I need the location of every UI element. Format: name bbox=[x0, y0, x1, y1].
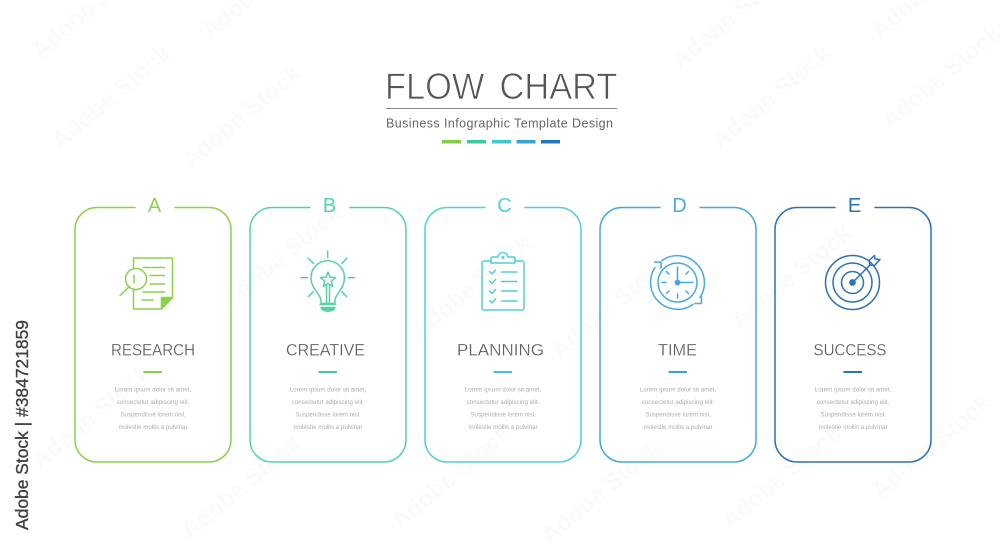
text: Adobe Stock bbox=[707, 39, 837, 155]
body text: Lorem ipsum dolor sit amet, bbox=[465, 386, 541, 394]
body text: Suspendisse lorem nisl, bbox=[470, 412, 536, 418]
card outline D bbox=[600, 208, 756, 462]
body text: consectetur adipiscing elit. bbox=[117, 399, 190, 406]
title rule bbox=[386, 108, 617, 110]
card outline E bbox=[775, 208, 931, 462]
icon: clipboard checklist bbox=[482, 252, 524, 310]
body text: molestie mollis a pulvinar bbox=[118, 424, 188, 431]
text: Adobe Stock bbox=[47, 39, 177, 155]
heading: time: TIME bbox=[658, 340, 697, 360]
panel: time bbox=[600, 195, 756, 462]
letter E: E bbox=[848, 195, 861, 217]
card outline B bbox=[250, 208, 406, 462]
card outline A bbox=[75, 208, 231, 462]
body text: consectetur adipiscing elit. bbox=[817, 399, 890, 406]
card outline C bbox=[425, 208, 581, 462]
body text: Suspendisse lorem nisl, bbox=[295, 412, 361, 418]
text: Adobe Stock bbox=[727, 219, 857, 335]
body text bbox=[815, 386, 891, 431]
body text: consectetur adipiscing elit. bbox=[467, 399, 540, 406]
body text: Suspendisse lorem nisl, bbox=[120, 412, 186, 418]
panel: research bbox=[75, 195, 231, 462]
body text: consectetur adipiscing elit. bbox=[642, 399, 715, 406]
body text: consectetur adipiscing elit. bbox=[292, 399, 365, 406]
text: Adobe Stock bbox=[177, 59, 307, 175]
body text bbox=[640, 386, 716, 431]
panel: success bbox=[775, 195, 931, 462]
text: Adobe Stock bbox=[387, 419, 517, 535]
heading: success: SUCCESS bbox=[814, 340, 886, 360]
body text bbox=[465, 386, 541, 431]
body text: molestie mollis a pulvinar bbox=[643, 424, 713, 431]
heading: creative: CREATIVE bbox=[286, 340, 365, 360]
body text bbox=[290, 386, 366, 431]
body text: molestie mollis a pulvinar bbox=[818, 424, 888, 431]
heading: planning: PLANNING bbox=[457, 340, 544, 360]
icon: target with arrow bbox=[826, 256, 880, 310]
title: FLOW CHART bbox=[385, 66, 617, 107]
text: Adobe Stock bbox=[177, 429, 307, 545]
accent bar bbox=[494, 371, 512, 373]
accent bar bbox=[144, 371, 162, 373]
panel: planning bbox=[425, 195, 581, 462]
heading: research: RESEARCH bbox=[111, 340, 195, 360]
body text bbox=[115, 386, 191, 431]
subtitle: Business Infographic Template Design bbox=[386, 116, 613, 130]
body text: Suspendisse lorem nisl, bbox=[820, 412, 886, 418]
text: Adobe Stock bbox=[27, 359, 157, 475]
body text: molestie mollis a pulvinar bbox=[468, 424, 538, 431]
accent bar bbox=[844, 371, 862, 373]
accent bar bbox=[668, 371, 687, 373]
letter D: D bbox=[672, 195, 687, 217]
body text: Lorem ipsum dolor sit amet, bbox=[290, 386, 366, 394]
text: Adobe Stock bbox=[537, 434, 667, 550]
letter A: A bbox=[148, 195, 162, 217]
icon: document with magnifier bbox=[120, 258, 172, 309]
body text: Lorem ipsum dolor sit amet, bbox=[815, 386, 891, 394]
body text: Lorem ipsum dolor sit amet, bbox=[115, 386, 191, 394]
letter B: B bbox=[323, 195, 336, 217]
text: Adobe Stock bbox=[547, 249, 677, 365]
text: Adobe Stock bbox=[217, 199, 347, 315]
icon: clock with arrows bbox=[651, 256, 704, 309]
body text: molestie mollis a pulvinar bbox=[293, 424, 363, 431]
text: Adobe Stock bbox=[407, 229, 537, 345]
letter C: C bbox=[497, 195, 512, 217]
icon: light bulb with star bbox=[301, 251, 354, 311]
panel: creative bbox=[250, 195, 406, 462]
text: Adobe Stock bbox=[867, 389, 997, 505]
colour dashes bbox=[442, 140, 560, 144]
body text: Lorem ipsum dolor sit amet, bbox=[640, 386, 716, 394]
text: Adobe Stock bbox=[717, 419, 847, 535]
stock credit: Adobe Stock | #384721859 bbox=[12, 320, 32, 530]
body text: Suspendisse lorem nisl, bbox=[645, 412, 711, 418]
accent bar bbox=[318, 371, 337, 373]
